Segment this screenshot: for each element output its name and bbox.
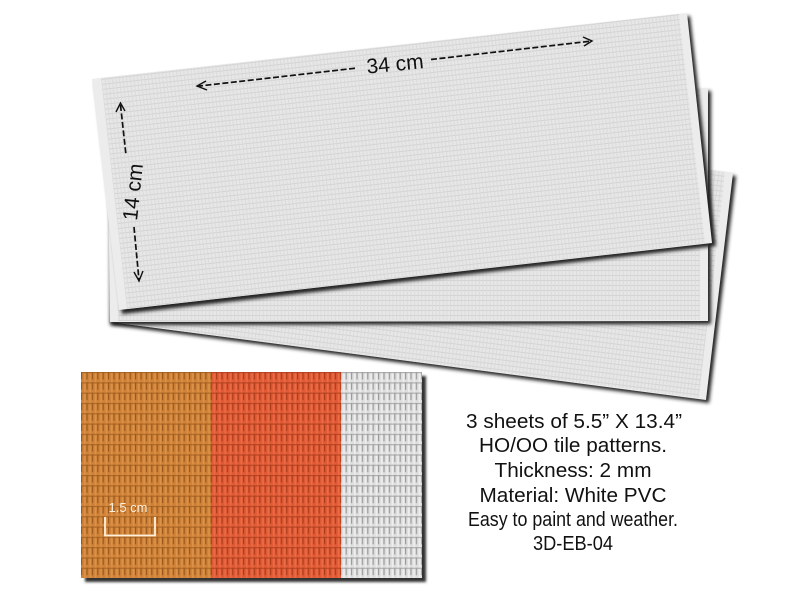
sheet: top PVC sheet xyxy=(92,13,716,314)
swatch: white tiles xyxy=(341,372,422,578)
dimension: 14 cm height arrow: 14 cm xyxy=(119,162,148,222)
text block: product specifications: Material: White PVC xyxy=(480,484,667,507)
text block: product specifications: Easy to paint and weather. xyxy=(468,509,678,531)
sheet: bottom PVC sheet xyxy=(110,95,736,403)
sheet: middle PVC sheet xyxy=(107,88,711,325)
scale bar: 1.5 cm xyxy=(105,500,155,536)
scale bar: 1.5 cm: 1.5 cm xyxy=(108,500,148,515)
dimension: 14 cm height arrow xyxy=(116,103,148,281)
text block: product specifications: 3D-EB-04 xyxy=(533,533,613,555)
text block: product specifications xyxy=(466,410,682,555)
swatch: orange tiles xyxy=(81,372,211,578)
text block: product specifications: 3 sheets of 5.5” X 13.4” xyxy=(466,410,682,433)
text block: product specifications: HO/OO tile patterns. xyxy=(479,434,667,457)
text block: product specifications: Thickness: 2 mm xyxy=(494,459,652,482)
swatch: red tiles xyxy=(211,372,341,578)
dimension: 34 cm width arrow xyxy=(197,37,592,90)
panel: roof tile colour swatch xyxy=(81,372,426,582)
dimension: 34 cm width arrow: 34 cm xyxy=(365,50,425,79)
